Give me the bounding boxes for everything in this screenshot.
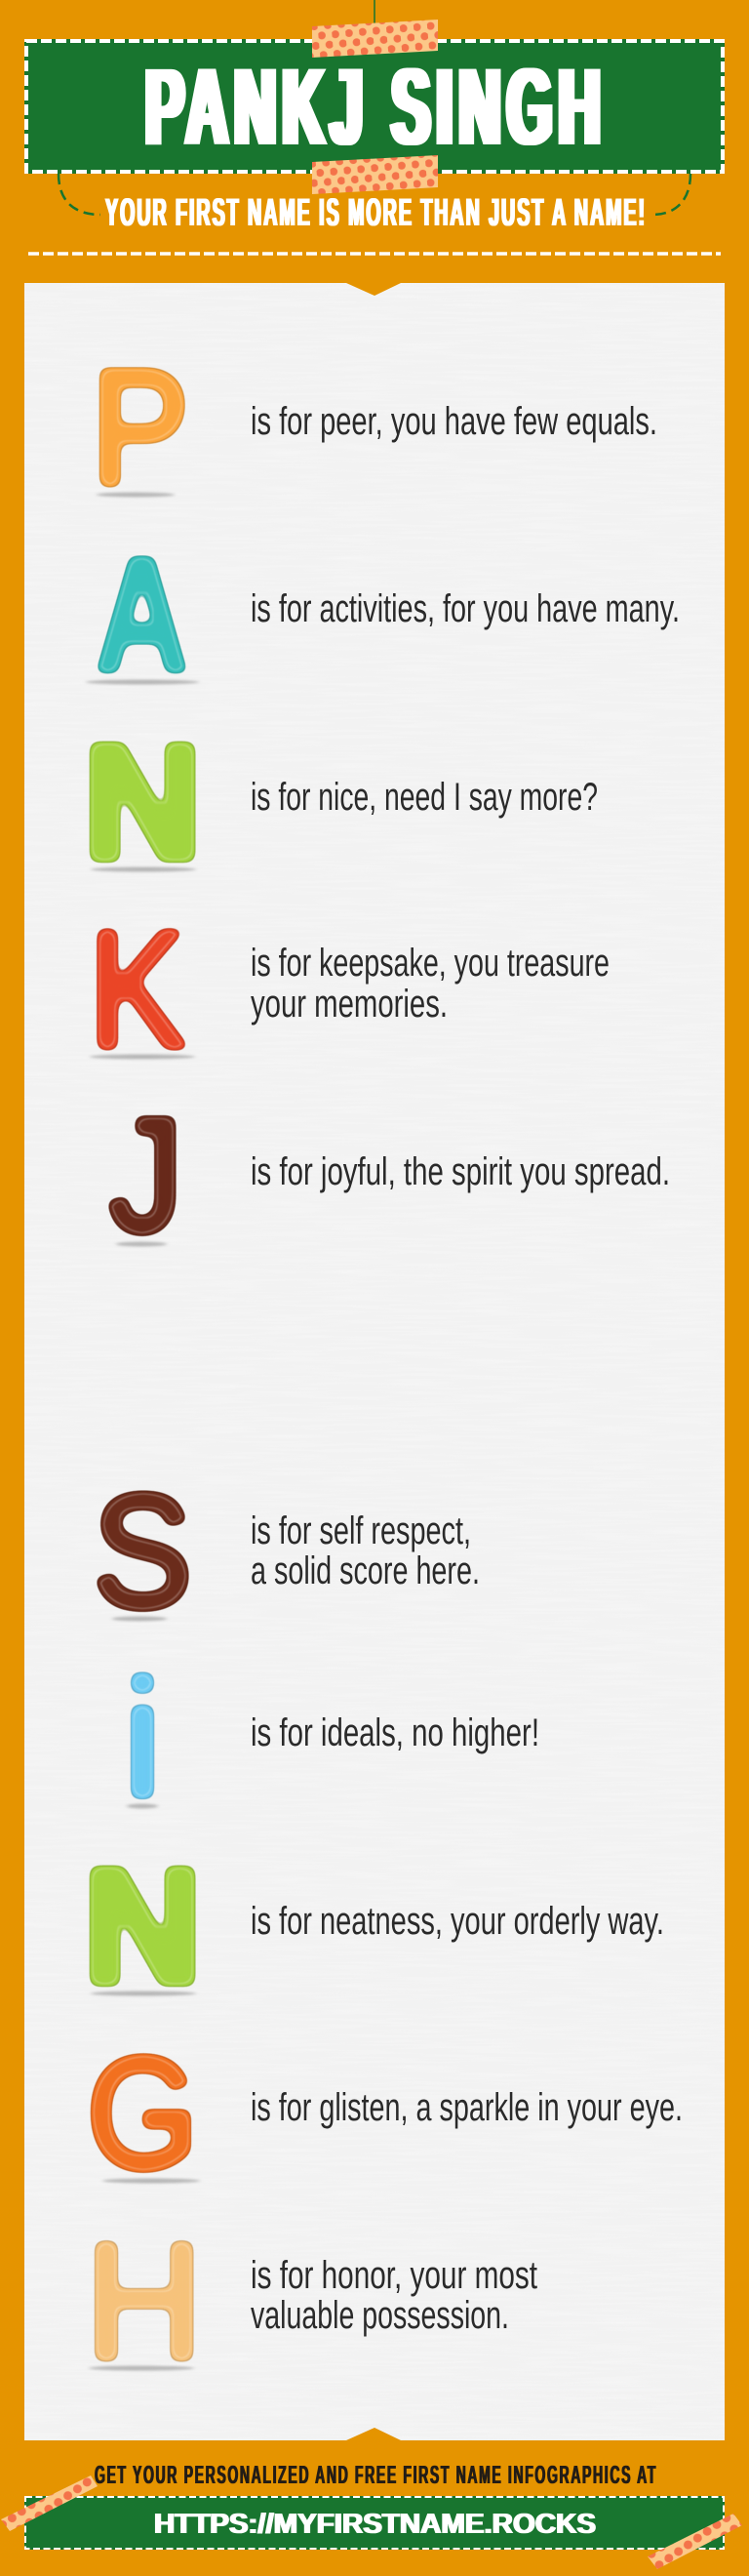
letter N second: N [84,1835,201,2017]
letter A: A [95,523,189,707]
text: H: is for honor, your most [251,2254,537,2297]
dashed connector left [59,174,100,215]
row: K [89,897,610,1081]
letter G: G [87,2025,198,2201]
dashed connector right [652,174,690,215]
text: K: is for keepsake, you treasure [251,942,610,985]
row: S [93,1463,480,1640]
tape: footer right [648,2514,742,2569]
letter S: S [93,1463,192,1640]
text: S line 2: a solid score here. [251,1550,480,1592]
letter H: H [86,2210,203,2393]
text: S: is for self respect, [251,1509,471,1552]
row: P [92,337,657,518]
panel: letters [24,283,725,2440]
footer url: HTTPS://MYFIRSTNAME.ROCKS [154,2509,596,2540]
row: i [123,1646,539,1831]
text: i: is for ideals, no higher! [251,1711,539,1754]
tape: top of banner [312,20,438,58]
letter K: K [89,897,185,1081]
row: A [86,523,680,707]
row: N second [84,1835,664,2017]
letter i: i [123,1646,162,1831]
row: N [84,711,598,893]
tape: footer left [1,2475,98,2531]
footer banner [24,2496,725,2550]
row: H [86,2210,537,2393]
hanging thread [374,0,375,25]
text: H line 2: valuable possession. [251,2294,509,2337]
text: N: is for nice, need I say more? [251,776,598,819]
text: K line 2: your memories. [251,983,448,1026]
tape: bottom of banner [312,155,438,194]
letter N: N [84,711,201,893]
title banner [24,39,725,174]
row: G [87,2025,683,2201]
letter P: P [92,337,189,518]
row: J [109,1085,670,1265]
letter J: J [109,1085,183,1265]
